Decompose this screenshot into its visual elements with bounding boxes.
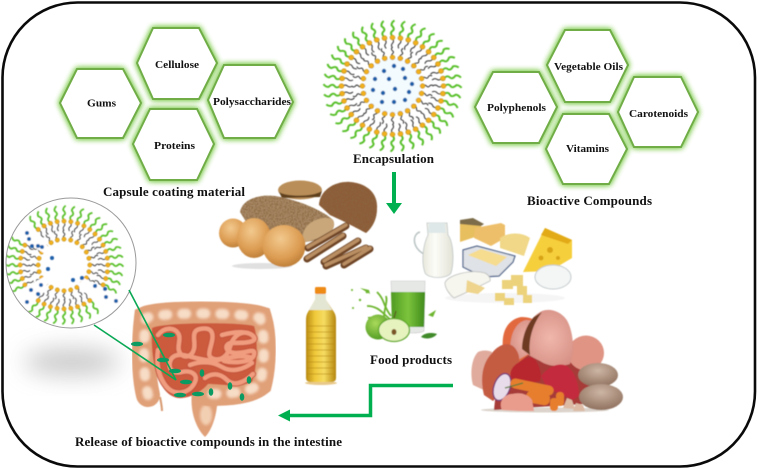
hexagon: vegetable oils (547, 30, 628, 102)
icon: green juice and apples (351, 281, 437, 342)
heading: capsule coating material: Capsule coating material (103, 184, 245, 199)
label: encapsulation: Encapsulation (353, 151, 435, 166)
callout lines to intestine (94, 290, 176, 380)
hexagon: vegetable oils: Vegetable Oils (554, 61, 624, 73)
hexagon: proteins: Proteins (154, 140, 196, 152)
arrow: encapsulation to food (386, 172, 402, 214)
icon: dairy products (414, 218, 572, 305)
hexagon: polyphenols (475, 72, 557, 143)
icon: assorted meats (471, 310, 623, 412)
label: release of bioactive compounds: Release of bioactive compounds in the intestine (75, 434, 342, 449)
panel: capsule coating material (60, 28, 293, 199)
label: food products: Food products (370, 352, 452, 367)
shadow under magnified micelle (24, 349, 120, 375)
hexagon: gums: Gums (87, 98, 117, 110)
released bioactive compounds (131, 333, 251, 401)
hexagon: carotenoids (618, 77, 698, 147)
icon: bread (219, 180, 377, 269)
hexagon: polysaccharides (208, 65, 293, 138)
hexagon: polyphenols: Polyphenols (487, 102, 547, 114)
arrow: food products to intestine (278, 386, 453, 422)
panel: bioactive compounds (475, 30, 698, 208)
callout: magnified ruptured micelle (6, 198, 136, 328)
icon: oil bottle (305, 287, 337, 385)
hexagon: proteins (133, 109, 214, 180)
hexagon: cellulose: Cellulose (155, 59, 199, 71)
icon: intestine (144, 314, 264, 437)
hexagon: polysaccharides: Polysaccharides (213, 96, 292, 108)
hexagon: vitamins: Vitamins (566, 143, 610, 155)
hexagon: gums (60, 69, 141, 138)
icon: encapsulated micelle (267, 0, 528, 207)
heading: bioactive compounds: Bioactive Compounds (527, 193, 652, 208)
hexagon: vitamins (546, 114, 627, 184)
hexagon: cellulose (137, 28, 217, 99)
hexagon: carotenoids: Carotenoids (629, 108, 689, 120)
